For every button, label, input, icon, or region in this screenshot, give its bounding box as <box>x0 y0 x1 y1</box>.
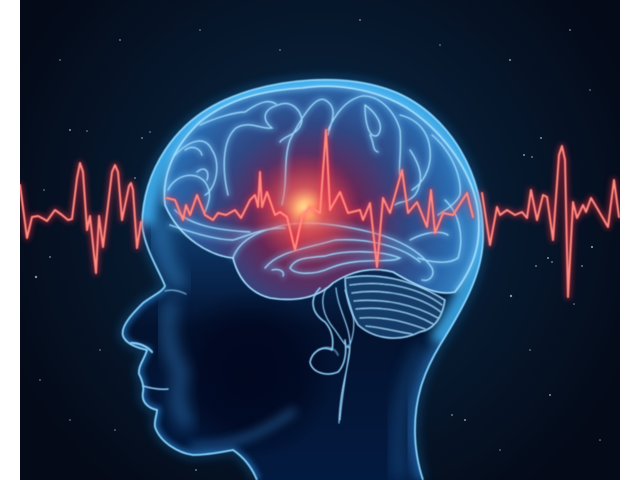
wave glow <box>20 130 619 297</box>
brain <box>164 86 479 299</box>
wave core <box>20 130 619 297</box>
gyri soft shading <box>168 96 461 280</box>
brain wave line <box>20 130 619 297</box>
facial details <box>131 290 186 389</box>
head inner glow and facial shading <box>123 80 483 480</box>
head silhouette <box>123 80 483 480</box>
brain stem and ear <box>310 288 354 423</box>
cerebellum <box>345 276 445 338</box>
brain outline <box>164 86 479 299</box>
nostril <box>131 343 152 352</box>
head outer glow <box>123 80 483 480</box>
brain rim glow <box>164 86 479 292</box>
mouth <box>143 386 168 389</box>
head edge line <box>123 80 483 480</box>
gyri folds <box>168 96 461 280</box>
brain fill <box>164 86 479 299</box>
head fill <box>123 80 483 480</box>
center glow <box>250 153 360 263</box>
eye <box>165 290 186 294</box>
